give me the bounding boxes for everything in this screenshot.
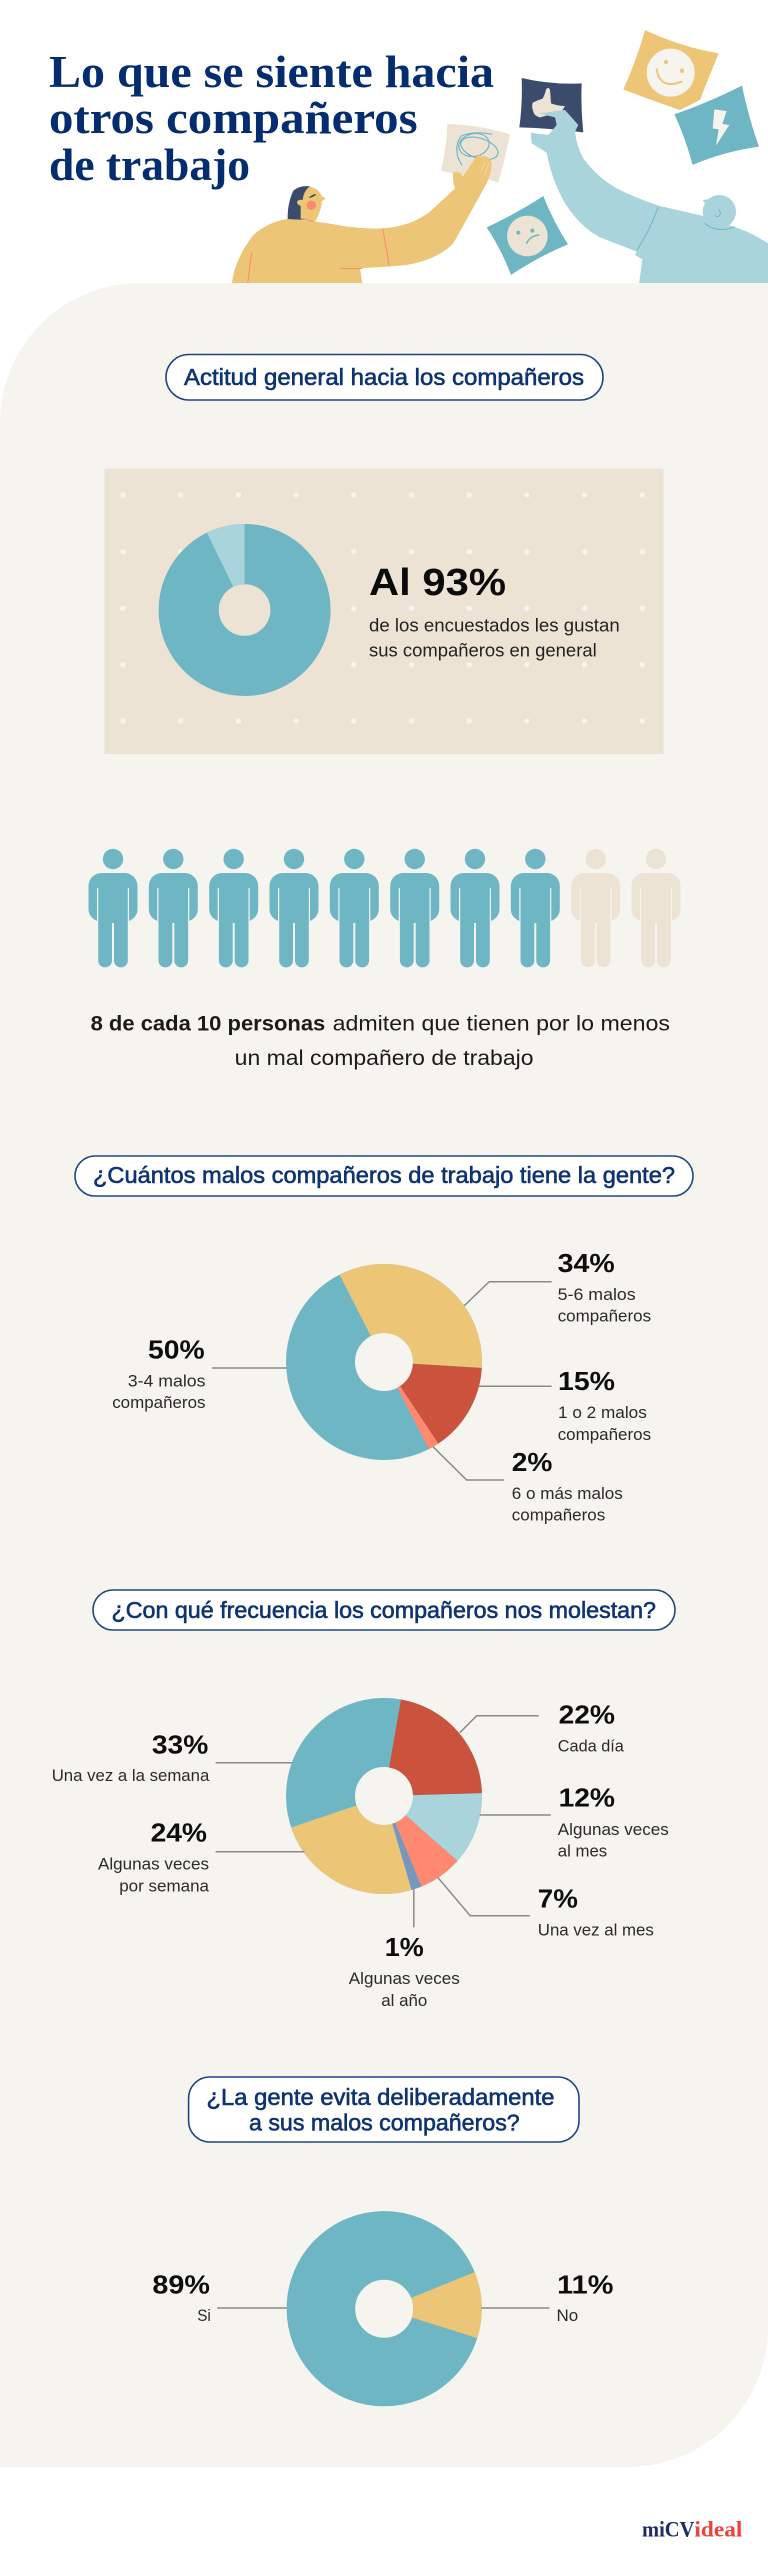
heading: deliberately avoid — [189, 2077, 579, 2142]
title: Lo que se siente hacia — [49, 46, 494, 97]
text: 8 of 10 statement — [91, 1012, 670, 1070]
text: 8 of 10 statement: un mal compañero de trabajo — [235, 1046, 534, 1070]
callout: 34 percent: compañeros — [558, 1307, 651, 1326]
person: woman with yellow shirt — [232, 155, 491, 285]
heading: how often coworkers annoy: ¿Con qué frecuencia los compañeros nos molestan? — [112, 1597, 656, 1623]
callout: 24 percent: Algunas veces — [98, 1854, 209, 1873]
heading: how many bad coworkers — [75, 1156, 693, 1196]
heading: how often coworkers annoy — [93, 1590, 675, 1630]
text: 8 of 10 statement: admiten que tienen por lo menos — [333, 1012, 670, 1036]
heading: attitude: Actitud general hacia los compañeros — [184, 364, 584, 390]
heading: deliberately avoid: ¿La gente evita deliberadamente — [206, 2084, 554, 2110]
callout: 12 percent: Algunas veces — [558, 1820, 669, 1839]
icon: smiling face paper — [623, 30, 719, 110]
chart: 93 percent donut — [170, 535, 319, 685]
callout: 34 percent: 34% — [558, 1248, 615, 1278]
callout: 22 percent: 22% — [559, 1700, 615, 1730]
icon: sad face paper — [487, 196, 568, 275]
heading: deliberately avoid: a sus malos compañeros? — [249, 2110, 520, 2136]
callout: 12 percent: al mes — [558, 1842, 607, 1861]
callout: 33 percent — [52, 1729, 292, 1785]
logo — [642, 2517, 742, 2542]
callout: 1 percent — [349, 1889, 460, 2010]
chart: frequency donut — [294, 1706, 474, 1886]
callout: 33 percent: 33% — [152, 1729, 208, 1759]
callout: 24 percent: 24% — [151, 1818, 207, 1848]
callout: 12 percent: 12% — [559, 1783, 615, 1813]
callout: 2 percent — [433, 1447, 623, 1525]
chart: bad coworkers donut — [296, 1274, 472, 1450]
title — [49, 46, 494, 190]
callout: 34 percent: 5-6 malos — [558, 1285, 636, 1304]
icon: lightning bolt paper — [674, 86, 759, 165]
callout: 7 percent: 7% — [538, 1884, 578, 1914]
title: otros compañeros — [49, 92, 418, 143]
text: 93 percent statement — [369, 562, 620, 661]
callout: 89 percent: Si — [197, 2306, 211, 2325]
panel: 93 percent card — [104, 469, 664, 754]
chart: 8 of 10 people pictogram — [88, 849, 680, 967]
callout: 15 percent: 15% — [558, 1366, 615, 1396]
person: man with blue shirt — [531, 110, 768, 287]
callout: 15 percent: 1 o 2 malos — [558, 1403, 647, 1422]
callout: 24 percent — [98, 1818, 304, 1896]
callout: 11 percent — [481, 2269, 613, 2325]
callout: 11 percent: No — [556, 2306, 578, 2325]
logo: ideal — [694, 2517, 742, 2542]
callout: 50 percent: 3-4 malos — [128, 1372, 206, 1391]
icon: thumbs up paper — [519, 78, 583, 132]
logo: miCV — [642, 2517, 695, 2542]
callout: 12 percent — [480, 1783, 669, 1861]
callout: 50 percent: 50% — [148, 1335, 205, 1365]
hero illustration — [232, 30, 768, 287]
title: de trabajo — [49, 139, 250, 190]
callout: 15 percent: compañeros — [558, 1425, 651, 1444]
callout: 7 percent — [438, 1877, 654, 1940]
heading: attitude — [166, 354, 603, 400]
callout: 2 percent: 6 o más malos — [512, 1484, 623, 1503]
callout: 22 percent — [460, 1700, 624, 1756]
callout: 2 percent: compañeros — [512, 1506, 605, 1525]
callout: 7 percent: Una vez al mes — [538, 1921, 654, 1940]
callout: 50 percent: compañeros — [112, 1393, 206, 1412]
callout: 1 percent: Algunas veces — [349, 1969, 460, 1988]
chart: avoid donut — [302, 2226, 467, 2391]
callout: 2 percent: 2% — [512, 1447, 552, 1477]
text: 93 percent statement: de los encuestados les gustan — [369, 615, 620, 636]
text: 93 percent statement: Al 93% — [369, 562, 506, 604]
icon: scribble paper — [441, 124, 510, 183]
text: 93 percent statement: sus compañeros en general — [369, 640, 597, 661]
callout: 22 percent: Cada día — [558, 1737, 624, 1756]
callout: 11 percent: 11% — [557, 2269, 613, 2299]
callout: 1 percent: al año — [381, 1991, 427, 2010]
callout: 15 percent — [479, 1366, 651, 1444]
callout: 89 percent: 89% — [152, 2269, 210, 2299]
callout: 89 percent — [152, 2269, 287, 2325]
text: 8 of 10 statement: 8 de cada 10 personas — [91, 1012, 325, 1036]
callout: 34 percent — [464, 1248, 651, 1326]
callout: 50 percent — [112, 1335, 286, 1412]
callout: 33 percent: Una vez a la semana — [52, 1766, 210, 1785]
heading: how many bad coworkers: ¿Cuántos malos compañeros de trabajo tiene la gente? — [93, 1162, 675, 1188]
callout: 24 percent: por semana — [119, 1877, 210, 1896]
callout: 1 percent: 1% — [385, 1932, 424, 1962]
